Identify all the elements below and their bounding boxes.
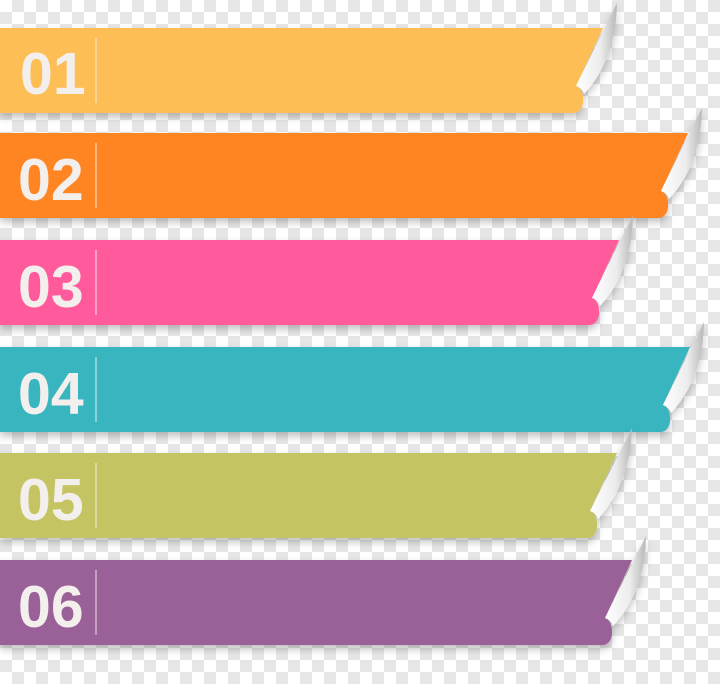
ribbon 06: 06 — [18, 574, 84, 640]
ribbon 02 — [0, 108, 702, 218]
ribbon 05: 05 — [18, 467, 84, 533]
ribbon 01: 01 — [20, 41, 86, 107]
ribbon 02: 02 — [18, 147, 84, 213]
ribbon 03: 03 — [18, 254, 84, 320]
ribbon 05 — [0, 428, 632, 538]
ribbon 06 — [0, 536, 646, 645]
ribbon 04: 04 — [18, 361, 84, 427]
ribbon 04 — [0, 322, 704, 432]
ribbon 01 — [0, 3, 617, 113]
ribbon 03 — [0, 215, 633, 325]
